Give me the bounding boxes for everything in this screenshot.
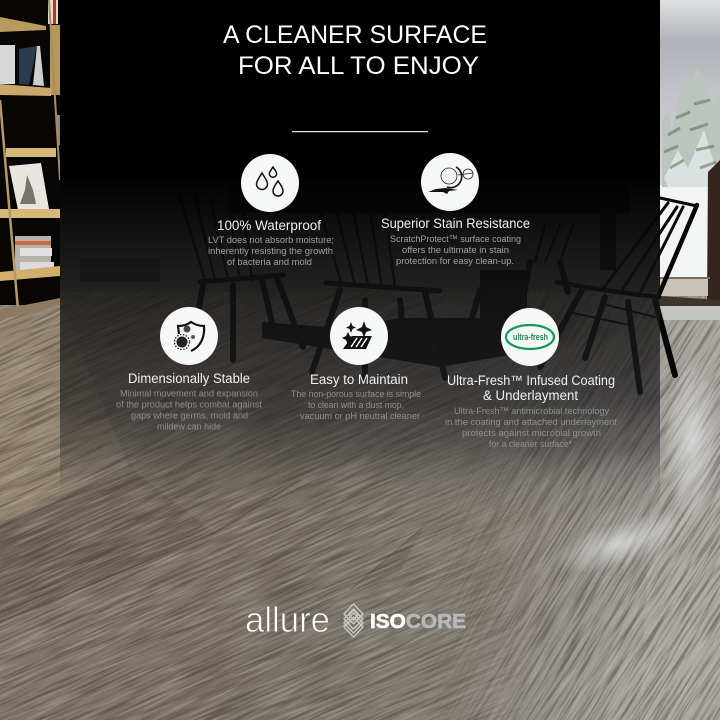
back wall behind table	[60, 0, 660, 292]
icon: shield with germs	[160, 307, 218, 365]
icon: water drops	[241, 154, 299, 212]
description: Ultra-Fresh™ antimicrobial technology	[454, 406, 609, 417]
heading: Superior Stain Resistance	[381, 216, 530, 231]
description: inherently resisting the growth	[208, 246, 333, 257]
feature: 100% Waterproof	[208, 154, 334, 268]
description: ScratchProtect™ surface coating	[390, 234, 521, 245]
feature: Dimensionally Stable	[116, 307, 262, 432]
title: FOR ALL TO ENJOY	[238, 52, 479, 80]
description: mildew can hide	[157, 422, 221, 432]
bookshelf	[0, 0, 60, 320]
description: of bacteria and mold	[227, 257, 312, 268]
feature: Easy to Maintain	[291, 307, 421, 422]
description: gaps where germs, mold and	[131, 410, 248, 422]
title: A CLEANER SURFACE	[223, 21, 487, 49]
description: LVT does not absorb moisture;	[208, 235, 334, 246]
heading: Dimensionally Stable	[128, 371, 250, 386]
icon: Ultra-Fresh logo: ultra-fresh	[513, 332, 548, 343]
icon: sparkling floor	[330, 307, 388, 365]
logo: allure: allure	[245, 599, 330, 640]
description	[208, 235, 334, 268]
description	[291, 389, 421, 422]
description	[390, 234, 521, 267]
icon: stain and scratch swirl	[421, 153, 479, 211]
description: protects against microbial growth	[462, 428, 601, 439]
description: to clean with a dust mop,	[308, 400, 404, 411]
title	[223, 21, 487, 80]
description: vacuum or pH neutral cleaner	[300, 411, 421, 422]
feature: Superior Stain Resistance	[381, 153, 530, 267]
icon: Ultra-Fresh logo	[501, 308, 559, 366]
logo: Isocore: ISOCORE	[370, 610, 466, 633]
dining table	[80, 185, 630, 367]
heading: & Underlayment	[483, 388, 578, 403]
description	[445, 406, 617, 450]
description: in the coating and attached underlayment	[445, 417, 617, 428]
window with snowy trees	[660, 0, 720, 320]
heading: Easy to Maintain	[310, 372, 408, 387]
heading	[447, 373, 615, 403]
description: Minimal movement and expansion	[120, 388, 258, 400]
brand logos	[245, 599, 466, 640]
description: protection for easy clean-up.	[396, 256, 514, 267]
description: of the product helps combat against	[116, 400, 262, 410]
wood floor	[0, 290, 720, 720]
description: offers the ultimate in stain	[402, 245, 509, 256]
description: The non-porous surface is simple	[291, 389, 421, 400]
icon: Isocore diamond	[344, 604, 363, 637]
feature: Ultra-Fresh coating	[445, 308, 617, 450]
description: for a cleaner surface*	[489, 439, 572, 450]
title rule	[292, 131, 428, 132]
dark gradient panel	[60, 0, 660, 518]
description	[116, 388, 262, 432]
heading: 100% Waterproof	[217, 218, 321, 233]
dining chairs	[180, 197, 697, 392]
heading: Ultra-Fresh™ Infused Coating	[447, 373, 615, 388]
